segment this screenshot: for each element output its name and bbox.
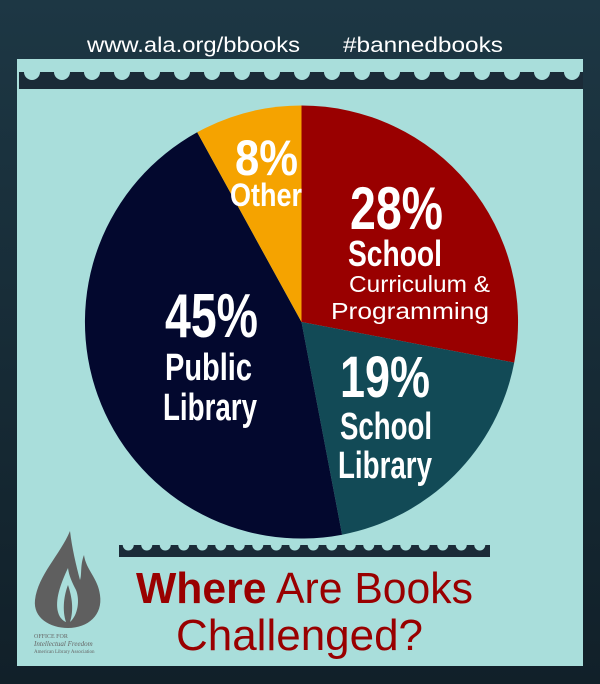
logo text	[33, 634, 95, 655]
label: 45% Public Library: Library	[163, 387, 257, 429]
label: 45% Public Library: Public	[165, 347, 252, 389]
label: 19% School Library	[338, 345, 432, 487]
label: 19% School Library: 19%	[340, 345, 430, 410]
label: 19% School Library: School	[340, 406, 432, 448]
label: 28% School Curriculum & Programming: School	[348, 233, 442, 274]
label: 8% Other: 8%	[235, 130, 298, 186]
label: 19% School Library: Library	[338, 445, 432, 487]
pie chart	[85, 105, 518, 539]
header links: www.ala.org/bbooks	[86, 34, 300, 57]
title	[136, 564, 473, 660]
label: 45% Public Library	[163, 282, 258, 429]
label: 28% School Curriculum & Programming: Programming	[331, 298, 489, 324]
top scalloped band	[19, 72, 583, 89]
label: 8% Other	[230, 130, 302, 213]
title: Challenged?	[176, 611, 423, 660]
label: 45% Public Library: 45%	[165, 282, 258, 351]
header links: #bannedbooks	[343, 34, 503, 57]
title: Where Are Books	[136, 564, 473, 613]
logo text: OFFICE FOR	[34, 634, 68, 640]
label: 28% School Curriculum & Programming: 28%	[350, 175, 443, 242]
header links	[86, 34, 503, 57]
label: 28% School Curriculum & Programming	[331, 175, 490, 324]
logo text: Intellectual Freedom	[33, 640, 93, 648]
logo text: American Library Association	[34, 650, 95, 655]
label: 8% Other: Other	[230, 177, 302, 213]
bottom scalloped band	[119, 545, 490, 557]
icon: flame logo	[35, 531, 100, 628]
label: 28% School Curriculum & Programming: Curriculum &	[349, 271, 490, 297]
